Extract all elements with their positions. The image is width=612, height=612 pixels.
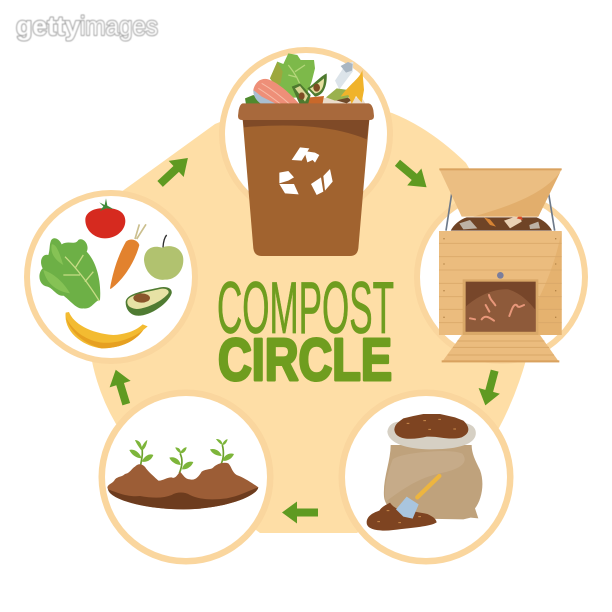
carrot [110, 224, 146, 289]
recycle symbol [279, 147, 333, 195]
icon: food waste items [39, 198, 183, 348]
arrow: seedlings to food [105, 367, 137, 407]
composter lid [439, 168, 562, 217]
sack highlight [385, 451, 465, 502]
watermark: images [80, 11, 158, 41]
icon: waste bin with food scraps [238, 53, 374, 256]
tomato [85, 198, 125, 238]
soil shadow [108, 487, 258, 509]
watermark: getty [16, 11, 80, 41]
sack collar [387, 422, 476, 449]
arrow: bin to composter [390, 154, 434, 196]
arrow: composter to sack [475, 368, 505, 408]
background pale pentagon [90, 102, 540, 533]
bin body [243, 119, 369, 256]
window with worms [463, 279, 538, 335]
banana [65, 312, 148, 348]
bin rim [238, 103, 374, 120]
infographic: compost circle: COMPOST [217, 268, 394, 349]
arrow: sack to seedlings [282, 502, 318, 524]
icon: sack of compost with shovel [367, 414, 482, 531]
watermark [16, 11, 158, 41]
arrow: food to bin [153, 150, 195, 192]
vent [497, 272, 504, 279]
composter box [439, 231, 562, 335]
title [217, 268, 394, 393]
lettuce [39, 238, 100, 309]
icon: seedlings in soil [107, 439, 258, 509]
steps [442, 335, 559, 362]
icon: wooden composter with worms [439, 168, 562, 362]
title line: circle: CIRCLE [218, 327, 392, 393]
bin shadow under rim [243, 119, 369, 139]
apple [144, 235, 183, 280]
shovel [396, 476, 439, 519]
compost pile [367, 503, 437, 531]
sack body [384, 445, 482, 519]
avocado [126, 287, 172, 316]
circle rings and white discs [24, 47, 588, 564]
lid supports [446, 192, 555, 231]
plants [129, 439, 234, 473]
compost in box [451, 214, 552, 231]
food scraps [245, 53, 368, 108]
compost in sack [394, 414, 468, 439]
soil [107, 463, 258, 509]
